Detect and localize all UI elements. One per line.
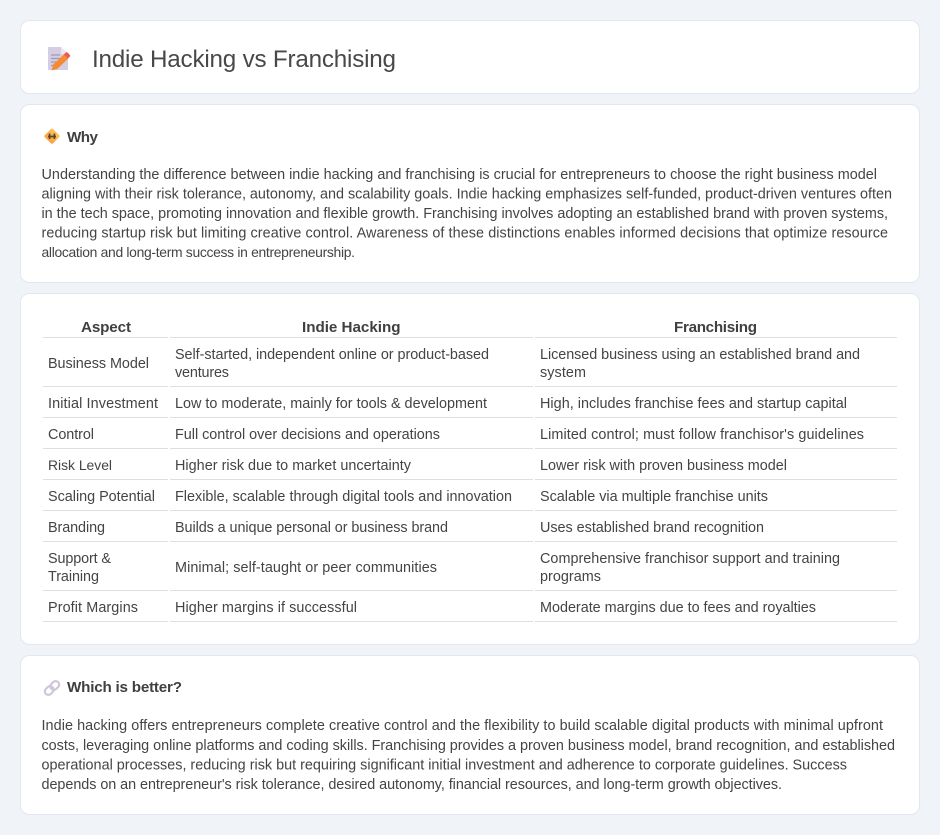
row: support and training: programs (540, 569, 601, 585)
text block: which is better paragraph: costs, leveraging online platforms and coding skills. Franchising provides a proven business model, brand recognition, and established (42, 738, 895, 754)
row: branding (43, 520, 897, 542)
row: business model: Business Model (48, 356, 149, 372)
row: branding: Builds a unique personal or business brand (175, 520, 448, 536)
table header row: Indie Hacking (302, 319, 400, 336)
heading: why: Why (67, 129, 99, 146)
row: profit margins: Profit Margins (48, 600, 138, 616)
row: support and training: Training (48, 569, 99, 585)
row: scaling potential: Scalable via multiple franchise units (540, 489, 768, 505)
text block: which is better paragraph: operational processes, reducing risk but requiring significant initial investment and adherence to corporate guidelines. Success (42, 758, 847, 774)
text block: why paragraph: in the tech space, promoting innovation and flexible growth. Franchising involves adopting an established brand with proven systems, (42, 206, 888, 222)
row: support and training: Minimal; self-taught or peer communities (175, 560, 437, 576)
row: profit margins: Moderate margins due to fees and royalties (540, 600, 816, 616)
row: risk level: Lower risk with proven business model (540, 458, 787, 474)
text block: why paragraph (42, 167, 892, 260)
text block: why paragraph: aligning with their risk tolerance, autonomy, and scalability goals. Indie hacking emphasizes self-funded, product-driven ventures often (42, 186, 892, 202)
row: risk level: Risk Level (48, 457, 112, 473)
text block: which is better paragraph (42, 718, 895, 793)
table header row (43, 319, 897, 338)
text block: which is better paragraph: depends on an entrepreneur's risk tolerance, desired autonomy, financial resources, and long-term growth objectives. (42, 777, 782, 793)
title: Indie Hacking vs Franchising (92, 46, 396, 73)
row: risk level: Higher risk due to market uncertainty (175, 458, 412, 474)
row: support and training: Comprehensive franchisor support and training (540, 551, 840, 567)
row: business model (43, 347, 897, 387)
table header row: Franchising (674, 319, 757, 336)
row: control (43, 427, 897, 449)
text block: which is better paragraph: Indie hacking offers entrepreneurs complete creative control and the flexibility to build scalable digital products with minimal upfront (42, 718, 883, 734)
icon: orange diamond sign (44, 128, 60, 144)
row: initial investment: High, includes franchise fees and startup capital (540, 396, 847, 412)
row: control: Control (48, 427, 94, 443)
icon: chain link (43, 680, 61, 696)
text block: why paragraph: Understanding the difference between indie hacking and franchising is crucial for entrepreneurs to choose the right business model (42, 167, 877, 183)
row: business model: ventures (175, 365, 229, 381)
row: business model: system (540, 365, 586, 381)
row: initial investment: Low to moderate, mainly for tools & development (175, 396, 487, 412)
text block: why paragraph: reducing startup risk but limiting creative control. Awareness of these distinctions enables informed decisions that optimize resource (42, 226, 888, 242)
row: business model: Self-started, independent online or product-based (175, 347, 489, 363)
row: support and training (43, 551, 897, 591)
row: branding: Uses established brand recognition (540, 520, 764, 536)
panel: title header (20, 20, 920, 94)
row: control: Limited control; must follow franchisor's guidelines (540, 427, 864, 443)
row: business model: Licensed business using an established brand and (540, 347, 860, 363)
panel: comparison table (20, 294, 920, 644)
row: initial investment (43, 396, 897, 418)
panel: which is better (20, 656, 920, 814)
table header row: Aspect (81, 319, 131, 336)
row: branding: Branding (48, 520, 105, 536)
row: initial investment: Initial Investment (48, 396, 158, 412)
icon: document with pencil (48, 47, 70, 70)
row: risk level (43, 457, 897, 480)
row: control: Full control over decisions and operations (175, 427, 440, 443)
row: scaling potential (43, 489, 897, 511)
row: profit margins: Higher margins if successful (175, 600, 357, 616)
row: scaling potential: Flexible, scalable through digital tools and innovation (175, 489, 512, 505)
row: support and training: Support & (48, 551, 111, 567)
panel: why (20, 104, 920, 282)
row: scaling potential: Scaling Potential (48, 489, 155, 505)
heading: which is better: Which is better? (67, 679, 182, 696)
row: profit margins (43, 600, 897, 622)
text block: why paragraph: allocation and long-term success in entrepreneurship. (42, 244, 355, 260)
